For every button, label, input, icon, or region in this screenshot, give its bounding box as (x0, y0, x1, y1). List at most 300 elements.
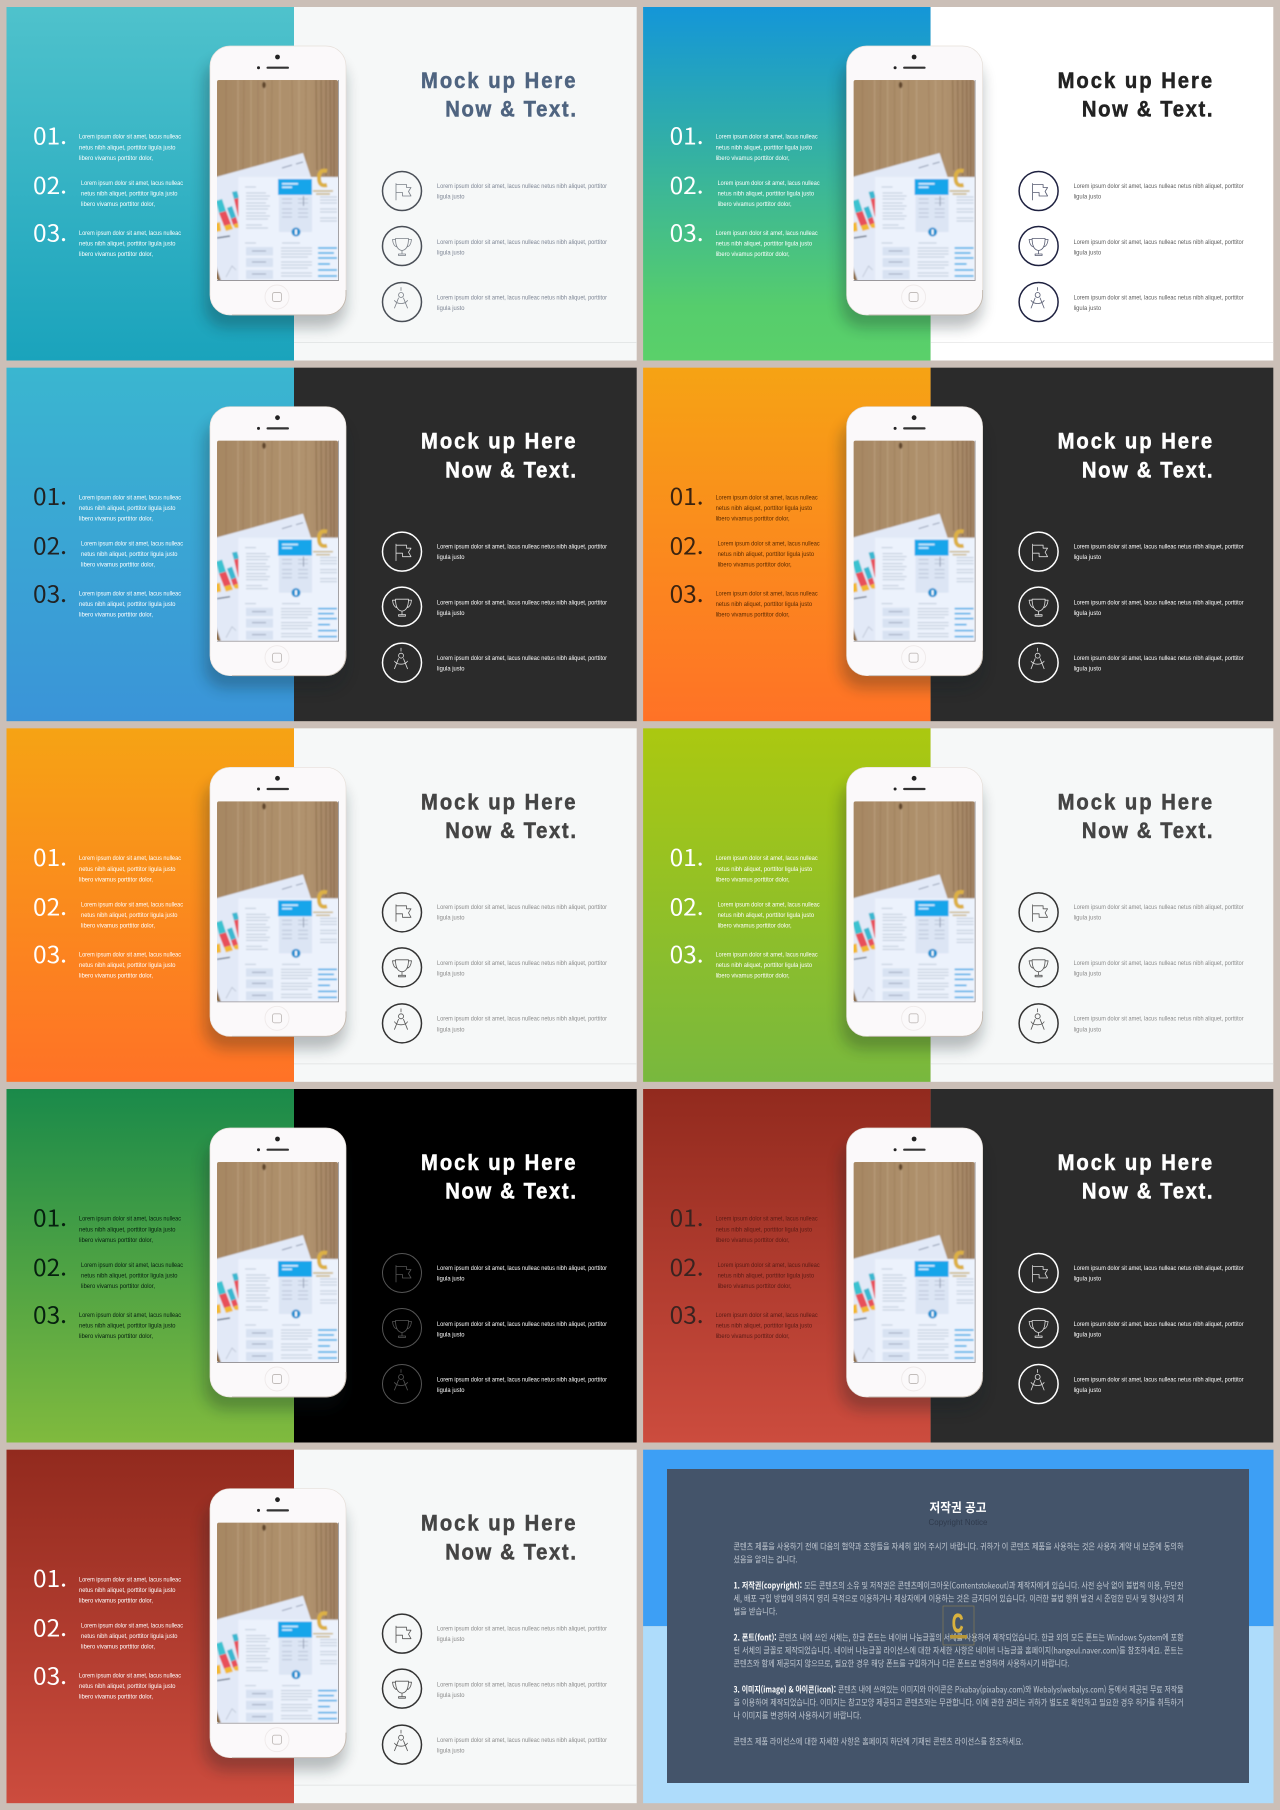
step 01: netus nibh aliquet, porttitor ligula justo (716, 866, 812, 873)
step 01: libero vivamus porttitor dolor, (716, 516, 790, 523)
step 03: libero vivamus porttitor dolor, (716, 972, 790, 979)
step 02: libero vivamus porttitor dolor, (81, 201, 155, 208)
phone mockup (841, 767, 983, 1049)
step 02: libero vivamus porttitor dolor, (81, 1283, 155, 1290)
step 02: 02. (670, 1249, 704, 1283)
feature: compass: ligula justo (437, 666, 465, 673)
step 01: Lorem ipsum dolor sit amet, lacus nulleac (79, 1216, 182, 1223)
step 01: Lorem ipsum dolor sit amet, lacus nulleac (716, 134, 818, 141)
step 02: libero vivamus porttitor dolor, (718, 922, 792, 929)
step 01: Lorem ipsum dolor sit amet, lacus nulleac (79, 494, 182, 501)
feature: trophy (1019, 226, 1244, 266)
step 01: netus nibh aliquet, porttitor ligula justo (79, 866, 176, 873)
title: Mock up Here (1058, 69, 1212, 93)
step 01: Lorem ipsum dolor sit amet, lacus nulleac (79, 855, 182, 862)
title: Mock up Here (1058, 1151, 1212, 1175)
feature: flag: ligula justo (1074, 193, 1101, 200)
step 02 (670, 167, 820, 208)
step 02 (670, 528, 820, 569)
feature: trophy: Lorem ipsum dolor sit amet, lacus nulleac netus nibh aliquet, porttitor (437, 960, 608, 967)
panel 3: sky blue and charcoal (6, 368, 637, 721)
left gradient half (643, 728, 931, 1082)
notice body text: 콘텐츠 제품을 사용하기 전에 다음의 협약과 조항들을 자세히 읽어 주시기 바랍니다. 귀하가 이 콘텐츠 제품을 사용하는 것은 사용자 계약 내 보증에 동의하 (734, 1541, 1184, 1553)
step 02 (670, 1249, 820, 1290)
step 01: netus nibh aliquet, porttitor ligula justo (79, 505, 176, 512)
step 03: Lorem ipsum dolor sit amet, lacus nulleac (79, 230, 182, 237)
feature: compass (1019, 282, 1244, 322)
step 02: 02. (33, 888, 67, 922)
title: Mock up Here (421, 791, 576, 815)
step 03: netus nibh aliquet, porttitor ligula justo (716, 601, 812, 608)
notice body text (734, 1541, 1184, 1748)
panel 1: teal and light (6, 7, 637, 360)
title (1058, 69, 1213, 122)
feature: compass (382, 1364, 608, 1404)
left gradient half (643, 7, 931, 360)
feature: trophy (382, 1669, 608, 1708)
step 03 (33, 215, 182, 258)
gold C badge (943, 1606, 974, 1645)
step 03 (33, 1297, 182, 1340)
panel 2: blue-green and white (643, 7, 1273, 360)
step 01: 01. (33, 839, 67, 873)
phone mockup (204, 46, 346, 328)
step 03: Lorem ipsum dolor sit amet, lacus nulleac (79, 1673, 182, 1680)
phone mockup (841, 407, 983, 689)
step 01: 01. (33, 1560, 67, 1594)
step 01: Lorem ipsum dolor sit amet, lacus nulleac (716, 494, 818, 501)
left gradient half (6, 7, 294, 360)
step 02: 02. (670, 167, 704, 201)
feature: trophy: ligula justo (437, 971, 465, 978)
left gradient half (6, 368, 294, 721)
title (1058, 1151, 1213, 1204)
feature: flag: ligula justo (437, 193, 465, 200)
step 03: libero vivamus porttitor dolor, (79, 972, 153, 979)
feature: compass: Lorem ipsum dolor sit amet, lacus nulleac netus nibh aliquet, porttitor (1074, 1016, 1244, 1023)
step 02: libero vivamus porttitor dolor, (81, 562, 155, 569)
feature: trophy: Lorem ipsum dolor sit amet, lacus nulleac netus nibh aliquet, porttitor (437, 239, 608, 246)
step 02: 02. (33, 167, 67, 201)
feature: trophy: ligula justo (1074, 1331, 1101, 1338)
step 03: 03. (33, 215, 67, 249)
feature: trophy: ligula justo (1074, 971, 1101, 978)
step 02 (33, 888, 184, 929)
step 01: 01. (670, 478, 704, 512)
title: Now & Text. (445, 459, 576, 483)
panel 9: red and light (6, 1450, 637, 1803)
step 02: netus nibh aliquet, porttitor ligula justo (718, 190, 814, 198)
feature: compass (382, 643, 608, 682)
feature: flag: Lorem ipsum dolor sit amet, lacus nulleac netus nibh aliquet, porttitor (437, 1265, 608, 1272)
step 03: 03. (670, 1297, 704, 1331)
step 02: Lorem ipsum dolor sit amet, lacus nulleac (81, 1262, 184, 1269)
title: Mock up Here (421, 69, 576, 93)
notice body text: 1. 저작권(copyright): 모든 콘텐츠의 소유 및 저작권은 콘텐츠메이크아웃(Contentstokeout)과 제작자에게 있습니다. 사전 승낙 없이 불법적 이용, 무단전 (734, 1580, 1184, 1592)
step 03: 03. (33, 575, 67, 609)
feature: flag: Lorem ipsum dolor sit amet, lacus nulleac netus nibh aliquet, porttitor (1074, 543, 1244, 550)
step 01: 01. (670, 839, 704, 873)
left gradient half (6, 728, 294, 1082)
feature: compass: ligula justo (437, 1387, 465, 1394)
notice body text: 나 이미지를 변경하여 사용하시기 바랍니다. (734, 1710, 862, 1722)
feature: compass: Lorem ipsum dolor sit amet, lacus nulleac netus nibh aliquet, porttitor (437, 294, 608, 301)
feature: flag (382, 893, 608, 932)
title: Now & Text. (1082, 819, 1213, 843)
feature: flag: Lorem ipsum dolor sit amet, lacus nulleac netus nibh aliquet, porttitor (437, 543, 608, 550)
step 03: netus nibh aliquet, porttitor ligula justo (716, 962, 812, 969)
step 01 (670, 1200, 818, 1244)
feature: flag (1019, 172, 1244, 210)
title: Mock up Here (1058, 430, 1212, 454)
step 02: netus nibh aliquet, porttitor ligula justo (718, 551, 814, 558)
step 03: netus nibh aliquet, porttitor ligula justo (79, 1683, 176, 1690)
step 02: netus nibh aliquet, porttitor ligula justo (81, 1633, 178, 1640)
step 02: netus nibh aliquet, porttitor ligula justo (81, 1272, 178, 1280)
step 02: 02. (33, 1249, 67, 1283)
feature: trophy: ligula justo (1074, 249, 1101, 256)
panel 10: copyright notice (643, 1450, 1274, 1803)
notice body text: 을 이용하여 제작되었습니다. 이미지는 참고모양 제공되고 콘텐츠와는 무관합니다. 이에 관한 권리는 귀하가 별도로 확인하고 필요한 경우 허가를 취득하거 (734, 1697, 1184, 1709)
feature: flag: Lorem ipsum dolor sit amet, lacus nulleac netus nibh aliquet, porttitor (437, 1625, 608, 1632)
phone mockup (204, 407, 346, 689)
pale blue bottom band (643, 1626, 1274, 1803)
step 02: netus nibh aliquet, porttitor ligula justo (718, 1272, 814, 1280)
step 02: Lorem ipsum dolor sit amet, lacus nulleac (81, 1623, 184, 1630)
step 02 (33, 528, 184, 569)
title (1058, 430, 1213, 483)
left gradient half (643, 368, 931, 721)
feature: compass: Lorem ipsum dolor sit amet, lacus nulleac netus nibh aliquet, porttitor (437, 1016, 608, 1023)
step 02: 02. (33, 1610, 67, 1644)
step 03 (33, 575, 182, 619)
step 01 (33, 478, 182, 523)
step 03 (670, 575, 818, 619)
feature: flag: ligula justo (1074, 915, 1101, 922)
step 03: libero vivamus porttitor dolor, (79, 612, 153, 619)
title (421, 1512, 576, 1565)
step 02: Lorem ipsum dolor sit amet, lacus nulleac (718, 180, 820, 187)
panel 6: lime and light (643, 728, 1273, 1082)
step 03: Lorem ipsum dolor sit amet, lacus nulleac (716, 951, 818, 958)
feature: trophy: ligula justo (437, 1692, 465, 1699)
step 01: netus nibh aliquet, porttitor ligula justo (716, 1226, 812, 1234)
step 02: Lorem ipsum dolor sit amet, lacus nulleac (81, 541, 184, 548)
step 03: netus nibh aliquet, porttitor ligula justo (79, 601, 176, 608)
step 01: Lorem ipsum dolor sit amet, lacus nulleac (716, 1216, 818, 1223)
panel 7: green and black (6, 1089, 637, 1442)
step 03: netus nibh aliquet, porttitor ligula justo (716, 1322, 812, 1330)
feature: compass: Lorem ipsum dolor sit amet, lacus nulleac netus nibh aliquet, porttitor (437, 1737, 608, 1744)
title: Now & Text. (1082, 459, 1213, 483)
feature: flag (1019, 893, 1244, 932)
gold C badge: C (952, 1609, 963, 1638)
feature: flag: ligula justo (1074, 1275, 1101, 1282)
step 03: 03. (670, 936, 704, 970)
title: Mock up Here (421, 430, 576, 454)
right half (931, 728, 1273, 1082)
step 01 (670, 839, 818, 883)
title: Now & Text. (445, 819, 576, 843)
notice card (667, 1469, 1249, 1783)
step 02: Lorem ipsum dolor sit amet, lacus nulleac (718, 541, 820, 548)
feature: trophy (1019, 1308, 1244, 1348)
step 03: netus nibh aliquet, porttitor ligula justo (79, 1322, 176, 1330)
step 03 (670, 215, 818, 258)
step 01: 01. (33, 118, 67, 152)
step 02: Lorem ipsum dolor sit amet, lacus nulleac (81, 901, 184, 908)
step 02: libero vivamus porttitor dolor, (718, 201, 792, 208)
feature: flag: Lorem ipsum dolor sit amet, lacus nulleac netus nibh aliquet, porttitor (437, 183, 608, 190)
phone mockup (204, 1128, 346, 1410)
step 03: libero vivamus porttitor dolor, (79, 1333, 153, 1340)
title: Now & Text. (1082, 1180, 1213, 1204)
notice body text: 3. 이미지(image) & 아이콘(icon): 콘텐츠 내에 쓰여있는 이미지와 아이콘은 Pixabay(pixabay.com)와 Webalys(webalys.com) 등에서 제공된 무료 저작물 (734, 1683, 1184, 1695)
title: Now & Text. (1082, 98, 1213, 122)
left gradient half (643, 1089, 931, 1442)
step 03 (33, 1657, 182, 1701)
feature: flag (382, 172, 608, 210)
step 03: Lorem ipsum dolor sit amet, lacus nulleac (79, 951, 182, 958)
step 01: netus nibh aliquet, porttitor ligula justo (716, 144, 812, 152)
step 01: Lorem ipsum dolor sit amet, lacus nulleac (79, 134, 182, 141)
step 03: netus nibh aliquet, porttitor ligula justo (79, 240, 176, 248)
feature: trophy: Lorem ipsum dolor sit amet, lacus nulleac netus nibh aliquet, porttitor (1074, 960, 1244, 967)
title (421, 791, 576, 843)
feature: compass (382, 282, 608, 322)
feature: flag (1019, 1254, 1244, 1292)
feature: trophy: ligula justo (437, 249, 465, 256)
right half (294, 1089, 637, 1442)
feature: trophy: Lorem ipsum dolor sit amet, lacus nulleac netus nibh aliquet, porttitor (437, 1681, 608, 1688)
feature: compass: Lorem ipsum dolor sit amet, lacus nulleac netus nibh aliquet, porttitor (1074, 655, 1244, 662)
notice body text: 2. 폰트(font): 콘텐츠 내에 쓰인 서체는, 한글 폰트는 네이버 나눔글꼴의 서체를 사용하여 제작되었습니다. 한글 외의 모든 폰트는 Windows System에 포함 (734, 1632, 1184, 1644)
feature: compass (1019, 1364, 1244, 1404)
step 01: netus nibh aliquet, porttitor ligula justo (79, 1587, 176, 1594)
left gradient half (6, 1450, 294, 1803)
step 03: libero vivamus porttitor dolor, (716, 251, 790, 258)
step 01: netus nibh aliquet, porttitor ligula justo (79, 144, 176, 152)
step 03: 03. (33, 936, 67, 970)
title (421, 1151, 576, 1204)
right half (931, 7, 1273, 360)
feature: trophy (1019, 587, 1244, 626)
step 01: netus nibh aliquet, porttitor ligula justo (79, 1226, 176, 1234)
title: Mock up Here (421, 1512, 576, 1536)
feature: compass: ligula justo (437, 1026, 465, 1033)
title: Mock up Here (421, 1151, 576, 1175)
feature: flag (382, 1614, 608, 1653)
step 02: 02. (670, 888, 704, 922)
right half (294, 1450, 637, 1803)
feature: compass: Lorem ipsum dolor sit amet, lacus nulleac netus nibh aliquet, porttitor (437, 1376, 608, 1383)
step 01: libero vivamus porttitor dolor, (79, 1598, 153, 1605)
step 02: libero vivamus porttitor dolor, (718, 562, 792, 569)
step 01: libero vivamus porttitor dolor, (79, 876, 153, 883)
feature: compass (382, 1004, 608, 1043)
step 03: libero vivamus porttitor dolor, (79, 251, 153, 258)
blue top band (643, 1450, 1274, 1626)
right half (294, 728, 637, 1082)
step 02: netus nibh aliquet, porttitor ligula justo (81, 190, 178, 198)
feature: trophy: ligula justo (1074, 610, 1101, 617)
feature: compass: ligula justo (1074, 1026, 1101, 1033)
feature: trophy (382, 226, 608, 266)
step 01: 01. (670, 1200, 704, 1234)
step 02: 02. (33, 528, 67, 562)
step 02: libero vivamus porttitor dolor, (718, 1283, 792, 1290)
title: Now & Text. (445, 1541, 576, 1565)
step 03 (670, 936, 818, 979)
step 01: Lorem ipsum dolor sit amet, lacus nulleac (79, 1576, 182, 1583)
title: Now & Text. (445, 98, 576, 122)
feature: flag (382, 532, 608, 571)
feature: flag: ligula justo (437, 1636, 465, 1643)
step 03 (33, 936, 182, 979)
panel 5: orange and light (6, 728, 637, 1082)
step 01: libero vivamus porttitor dolor, (79, 155, 153, 162)
right half (931, 1089, 1273, 1442)
step 02 (33, 1610, 184, 1651)
phone mockup (841, 1128, 983, 1410)
step 01: libero vivamus porttitor dolor, (716, 1237, 790, 1244)
step 02: libero vivamus porttitor dolor, (81, 1644, 155, 1651)
step 01 (33, 1200, 182, 1244)
phone mockup (841, 46, 983, 328)
step 01 (670, 478, 818, 523)
step 03: Lorem ipsum dolor sit amet, lacus nulleac (716, 1312, 818, 1319)
step 03: Lorem ipsum dolor sit amet, lacus nulleac (79, 591, 182, 598)
notice body text: 셨음을 알리는 겁니다. (734, 1553, 798, 1565)
step 02 (670, 888, 820, 929)
feature: compass: ligula justo (1074, 666, 1101, 673)
feature: compass: Lorem ipsum dolor sit amet, lacus nulleac netus nibh aliquet, porttitor (437, 655, 608, 662)
step 03: 03. (670, 215, 704, 249)
step 02: netus nibh aliquet, porttitor ligula justo (81, 551, 178, 558)
notice body text: 콘텐츠와 함께 제공되지 않으므로, 필요한 경우 해당 폰트를 구입하거나 다른 폰트로 변경하여 사용하시기 바랍니다. (734, 1657, 1070, 1669)
feature: trophy (382, 948, 608, 987)
feature: compass: Lorem ipsum dolor sit amet, lacus nulleac netus nibh aliquet, porttitor (1074, 1376, 1244, 1383)
feature: compass: Lorem ipsum dolor sit amet, lacus nulleac netus nibh aliquet, porttitor (1074, 294, 1244, 301)
left gradient half (6, 1089, 294, 1442)
step 01: 01. (670, 118, 704, 152)
notice subheading: Copyright Notice (928, 1517, 988, 1527)
feature: compass: ligula justo (1074, 1387, 1101, 1394)
step 01 (33, 1560, 182, 1605)
feature: trophy: Lorem ipsum dolor sit amet, lacus nulleac netus nibh aliquet, porttitor (1074, 239, 1244, 246)
feature: trophy: ligula justo (437, 1331, 465, 1338)
step 03: 03. (33, 1657, 67, 1691)
step 01: libero vivamus porttitor dolor, (79, 1237, 153, 1244)
notice heading: 저작권 공고 (930, 1497, 986, 1516)
step 03: Lorem ipsum dolor sit amet, lacus nulleac (716, 591, 818, 598)
notice body text: 벌을 받습니다. (734, 1606, 778, 1618)
step 02: Lorem ipsum dolor sit amet, lacus nulleac (718, 1262, 820, 1269)
feature: flag: Lorem ipsum dolor sit amet, lacus nulleac netus nibh aliquet, porttitor (1074, 1265, 1244, 1272)
panel 4: orange and charcoal (643, 368, 1273, 721)
feature: compass (1019, 1004, 1244, 1043)
title (421, 69, 576, 122)
step 01: libero vivamus porttitor dolor, (716, 155, 790, 162)
feature: flag: Lorem ipsum dolor sit amet, lacus nulleac netus nibh aliquet, porttitor (1074, 183, 1244, 190)
feature: flag: ligula justo (437, 1275, 465, 1282)
step 02 (33, 1249, 184, 1290)
panel 8: red and charcoal (643, 1089, 1273, 1442)
feature: compass: ligula justo (437, 305, 465, 312)
feature: flag: Lorem ipsum dolor sit amet, lacus nulleac netus nibh aliquet, porttitor (1074, 904, 1244, 911)
step 01 (33, 118, 182, 162)
step 01 (670, 118, 818, 162)
feature: trophy: Lorem ipsum dolor sit amet, lacus nulleac netus nibh aliquet, porttitor (437, 1321, 608, 1328)
step 02: netus nibh aliquet, porttitor ligula justo (81, 912, 178, 919)
step 01: 01. (33, 1200, 67, 1234)
step 03: 03. (33, 1297, 67, 1331)
step 01: Lorem ipsum dolor sit amet, lacus nulleac (716, 855, 818, 862)
feature: compass: ligula justo (437, 1748, 465, 1755)
feature: trophy: Lorem ipsum dolor sit amet, lacus nulleac netus nibh aliquet, porttitor (437, 599, 608, 606)
step 03: netus nibh aliquet, porttitor ligula justo (716, 240, 812, 248)
step 01 (33, 839, 182, 883)
step 03: libero vivamus porttitor dolor, (716, 612, 790, 619)
feature: trophy: ligula justo (437, 610, 465, 617)
feature: compass (382, 1725, 608, 1764)
right half (294, 7, 637, 360)
notice body text: 콘텐츠 제품 라이선스에 대한 자세한 사항은 홈페이지 하단에 기재된 콘텐츠 라이선스를 참조하세요. (734, 1736, 1024, 1748)
step 03: libero vivamus porttitor dolor, (79, 1694, 153, 1701)
feature: flag: ligula justo (1074, 554, 1101, 561)
step 02: netus nibh aliquet, porttitor ligula justo (718, 912, 814, 919)
feature: compass: ligula justo (1074, 305, 1101, 312)
feature: trophy (382, 587, 608, 626)
feature: compass (1019, 643, 1244, 682)
step 02: 02. (670, 528, 704, 562)
step 03 (670, 1297, 818, 1340)
step 03: 03. (670, 575, 704, 609)
step 02: Lorem ipsum dolor sit amet, lacus nulleac (81, 180, 184, 187)
notice body text: 세, 배포 구입 방법에 의하지 영리 목적으로 이용하거나 제삼자에게 이용하는 것은 금지되어 있습니다. 이러한 불법 행위 발견 시 준엄한 민사 및 형사상의 처 (734, 1593, 1184, 1605)
step 01: libero vivamus porttitor dolor, (79, 516, 153, 523)
right half (931, 368, 1273, 721)
feature: flag: Lorem ipsum dolor sit amet, lacus nulleac netus nibh aliquet, porttitor (437, 904, 608, 911)
step 01: 01. (33, 478, 67, 512)
feature: flag: ligula justo (437, 915, 465, 922)
feature: trophy: Lorem ipsum dolor sit amet, lacus nulleac netus nibh aliquet, porttitor (1074, 599, 1244, 606)
step 01: netus nibh aliquet, porttitor ligula justo (716, 505, 812, 512)
step 03: libero vivamus porttitor dolor, (716, 1333, 790, 1340)
title: Now & Text. (445, 1180, 576, 1204)
feature: trophy (382, 1308, 608, 1348)
title: Mock up Here (1058, 791, 1212, 815)
notice body text: 된 서체의 글꼴로 제작되었습니다. 네이버 나눔글꼴 라이선스에 대한 자세한 사항은 네이버 나눔글꼴 홈페이지(hangeul.naver.com)를 참조하세요. 폰트는 (734, 1645, 1184, 1657)
step 02: Lorem ipsum dolor sit amet, lacus nulleac (718, 901, 820, 908)
step 02 (33, 167, 184, 208)
feature: flag: ligula justo (437, 554, 465, 561)
feature: trophy: Lorem ipsum dolor sit amet, lacus nulleac netus nibh aliquet, porttitor (1074, 1321, 1244, 1328)
step 01: libero vivamus porttitor dolor, (716, 876, 790, 883)
right half (294, 368, 637, 721)
title (1058, 791, 1213, 843)
phone mockup (204, 767, 346, 1049)
step 03: Lorem ipsum dolor sit amet, lacus nulleac (716, 230, 818, 237)
title (421, 430, 576, 483)
step 02: libero vivamus porttitor dolor, (81, 922, 155, 929)
step 03: netus nibh aliquet, porttitor ligula justo (79, 962, 176, 969)
step 03: Lorem ipsum dolor sit amet, lacus nulleac (79, 1312, 182, 1319)
phone mockup (204, 1489, 346, 1771)
feature: trophy (1019, 948, 1244, 987)
feature: flag (382, 1254, 608, 1292)
feature: flag (1019, 532, 1244, 571)
